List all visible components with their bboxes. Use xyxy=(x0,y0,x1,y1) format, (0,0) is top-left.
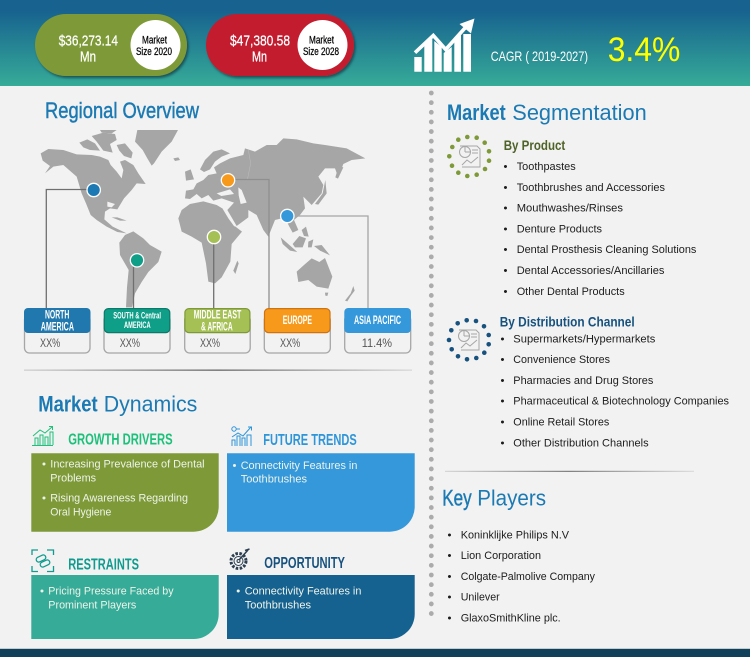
list: by product: Toothpastes xyxy=(517,161,576,173)
region card: asia pacific: 11.4% xyxy=(362,336,392,350)
heading: key players: Key xyxy=(442,486,472,511)
list: by distribution channel: • xyxy=(500,396,504,408)
world map xyxy=(41,130,365,307)
inland seas xyxy=(107,150,251,226)
list: by product: • xyxy=(504,223,508,235)
heading: market segmentation: Market xyxy=(447,100,506,125)
list: by product: Mouthwashes/Rinses xyxy=(517,203,623,215)
panel: opportunity: Toothbrushes xyxy=(245,599,311,611)
panel: restraints: RESTRAINTS xyxy=(68,556,139,574)
header band xyxy=(0,0,750,86)
panel: growth drivers xyxy=(31,426,219,532)
list: by distribution channel: Other Distribution Channels xyxy=(513,437,649,449)
list: key players: • xyxy=(448,571,452,583)
list: key players: Koninklijke Philips N.V xyxy=(461,529,569,541)
panel: restraints: Pricing Pressure Faced by xyxy=(48,585,174,597)
list: by distribution channel: Pharmacies and Drug Stores xyxy=(513,375,654,387)
region card: middle east and africa: & AFRICA xyxy=(201,322,233,334)
region card: europe xyxy=(264,309,330,353)
market size 2020 pill xyxy=(35,14,187,76)
list: key players: • xyxy=(448,612,452,624)
market size 2028 pill xyxy=(206,14,354,76)
region card: middle east and africa: MIDDLE EAST xyxy=(194,310,241,322)
list: by distribution channel: Convenience Stores xyxy=(513,354,610,366)
list: key players: Colgate-Palmolive Company xyxy=(461,571,595,583)
heading: regional overview: Regional Overview xyxy=(45,98,200,123)
panel: future trends: • xyxy=(232,460,236,472)
panel: restraints xyxy=(31,550,219,639)
panel: opportunity xyxy=(227,549,415,639)
panel: opportunity: • xyxy=(236,585,240,597)
list: by distribution channel: • xyxy=(500,375,504,387)
panel: future trends: FUTURE TRENDS xyxy=(263,432,357,449)
region card: south and central america xyxy=(104,309,170,353)
CAGR value: 3.4% xyxy=(608,31,680,69)
list: by product: • xyxy=(504,203,508,215)
CAGR label: CAGR ( 2019-2027) xyxy=(491,48,588,64)
panel: opportunity: Connectivity Features in xyxy=(245,585,361,597)
map marker: asia pacific xyxy=(281,209,294,223)
list: by distribution channel: • xyxy=(500,333,504,345)
region card: south and central america: XX% xyxy=(120,338,140,350)
market size 2020 pill: Size 2020 xyxy=(136,46,172,58)
heading: market dynamics: Market xyxy=(38,392,98,417)
region card: middle east and africa: XX% xyxy=(200,338,220,350)
list: by product: • xyxy=(504,244,508,256)
list: key players xyxy=(448,529,595,624)
list: by product: Toothbrushes and Accessories xyxy=(517,182,665,194)
region card: europe: XX% xyxy=(280,338,300,350)
list: by product: Other Dental Products xyxy=(517,286,625,298)
heading: market segmentation xyxy=(447,100,647,125)
region card: north america: XX% xyxy=(40,338,60,350)
panel: future trends: Connectivity Features in xyxy=(241,460,357,472)
region card: north america: AMERICA xyxy=(41,322,74,334)
market size 2028 pill: Mn xyxy=(252,48,267,66)
panel: growth drivers: Increasing Prevalence of Dental xyxy=(50,459,205,471)
list: key players: • xyxy=(448,550,452,562)
list: key players: • xyxy=(448,529,452,541)
icon: gear target xyxy=(231,549,250,568)
heading: market dynamics xyxy=(38,392,197,417)
list: by distribution channel: Online Retail Stores xyxy=(513,416,610,428)
list: by distribution channel: • xyxy=(500,354,504,366)
panel: growth drivers: Rising Awareness Regarding xyxy=(50,493,188,505)
panel: restraints: • xyxy=(40,585,44,597)
heading: market segmentation: Segmentation xyxy=(512,100,647,125)
region card: north america: NORTH xyxy=(45,310,69,322)
icon: trend chart xyxy=(232,427,252,446)
panel: growth drivers: Problems xyxy=(50,473,96,485)
list: by product: • xyxy=(504,161,508,173)
list: by distribution channel xyxy=(500,314,729,449)
icon: by distribution channel ring xyxy=(447,318,491,362)
region card: asia pacific xyxy=(344,308,411,353)
list: key players: • xyxy=(448,592,452,604)
list: by product: By Product xyxy=(504,137,566,153)
list: by product: Dental Accessories/Ancillaries xyxy=(517,265,665,277)
map marker: middle east and africa xyxy=(207,230,221,244)
panel: growth drivers: • xyxy=(42,492,46,504)
list: by product: • xyxy=(504,182,508,194)
connector lines xyxy=(46,180,368,309)
list: by distribution channel: • xyxy=(500,437,504,449)
icon: growth bars xyxy=(32,426,53,446)
icon: growth chart xyxy=(414,18,474,72)
panel: future trends: Toothbrushes xyxy=(241,474,307,486)
region card: north america xyxy=(24,308,90,353)
panel: opportunity: OPPORTUNITY xyxy=(264,555,345,572)
list: key players: Unilever xyxy=(461,592,500,604)
heading: key players xyxy=(442,486,546,511)
list: key players: Lion Corporation xyxy=(461,550,541,562)
market size 2028 pill: Size 2028 xyxy=(303,46,339,58)
map marker: south america xyxy=(130,254,144,267)
market size 2028 pill: Market xyxy=(309,34,334,46)
region card: middle east and africa xyxy=(185,309,250,353)
panel: growth drivers: GROWTH DRIVERS xyxy=(68,432,173,448)
icon: broken chain xyxy=(32,550,54,572)
panel: growth drivers: • xyxy=(42,458,46,470)
region card: south and central america: AMERICA xyxy=(124,320,151,331)
list: by distribution channel: By Distribution Channel xyxy=(500,314,635,330)
market size 2020 pill: $36,273.14 xyxy=(59,32,118,50)
map marker: europe xyxy=(221,174,235,187)
list: by product: Dental Prosthesis Cleaning Solutions xyxy=(517,244,697,256)
heading: market dynamics: Dynamics xyxy=(104,392,197,417)
panel: growth drivers: Oral Hygiene xyxy=(50,506,111,518)
market size 2020 pill: Market xyxy=(142,34,167,46)
icon: by product ring xyxy=(447,135,491,178)
list: by product: • xyxy=(504,265,508,277)
market size 2028 pill: $47,380.58 xyxy=(230,32,290,50)
list: by distribution channel: Pharmaceutical & Biotechnology Companies xyxy=(513,396,729,408)
footer band xyxy=(0,648,750,657)
list: by distribution channel: • xyxy=(500,416,504,428)
region card: europe: EUROPE xyxy=(283,315,312,327)
market size 2020 pill: Mn xyxy=(80,48,96,66)
region card: asia pacific: ASIA PACIFIC xyxy=(354,315,401,327)
list: by product xyxy=(504,137,697,298)
list: by product: Denture Products xyxy=(517,223,602,235)
list: by product: • xyxy=(504,286,508,298)
panel: restraints: Prominent Players xyxy=(48,599,137,611)
region card: south and central america: SOUTH & Central xyxy=(113,310,161,322)
heading: key players: Players xyxy=(477,486,546,511)
list: key players: GlaxoSmithKline plc. xyxy=(461,612,561,624)
list: by distribution channel: Supermarkets/Hypermarkets xyxy=(513,333,656,345)
map marker: north america xyxy=(87,183,100,197)
panel: future trends xyxy=(227,427,415,532)
